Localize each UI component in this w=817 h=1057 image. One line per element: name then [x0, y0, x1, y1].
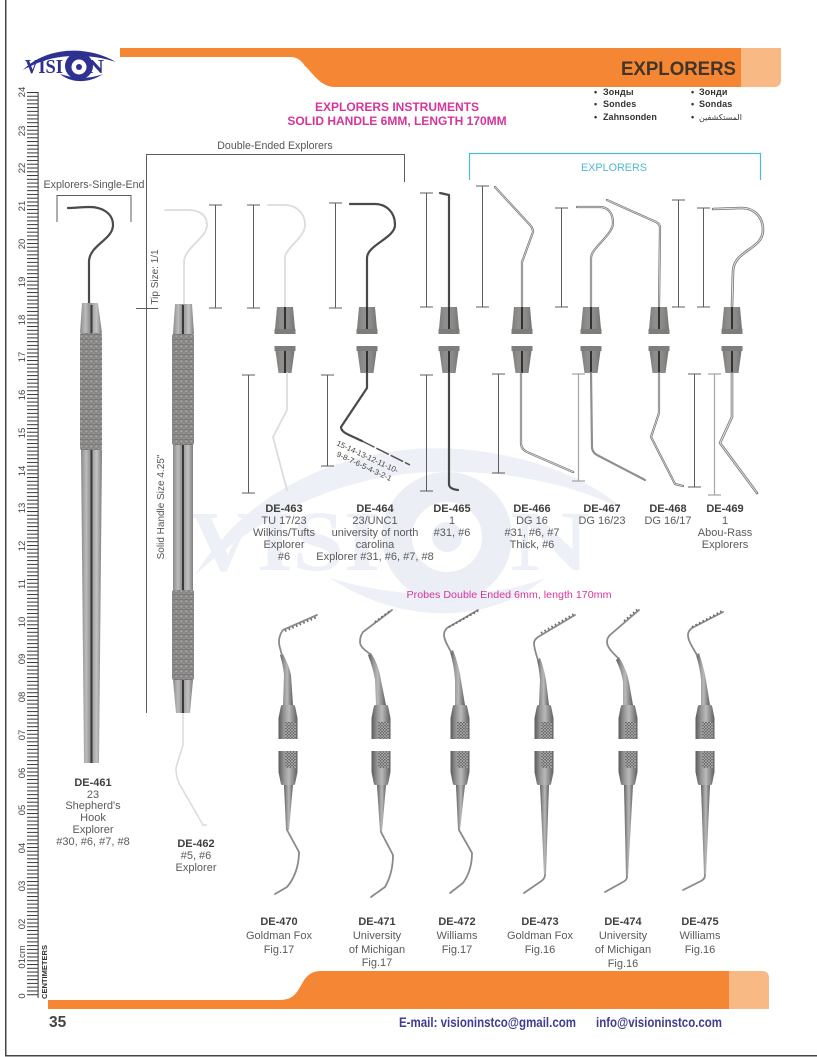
label: DE-466: DG 16	[516, 515, 548, 527]
multilingual names: •	[691, 87, 694, 97]
probe DE-473	[524, 614, 575, 893]
label: DE-474: Fig.16	[608, 958, 638, 970]
ruler: 22	[17, 163, 28, 173]
multilingual names: المستكشفين	[699, 113, 742, 122]
label: DE-464: university of north	[332, 527, 418, 539]
ruler: 0	[17, 993, 28, 999]
label: DE-466: DE-466	[513, 503, 551, 515]
bracket: double-ended: Double-Ended Explorers	[217, 140, 333, 152]
header band	[120, 48, 781, 87]
dimension lines	[209, 186, 721, 495]
watermark: Vision eye logo: VISI	[190, 493, 380, 589]
ruler: 04	[17, 843, 28, 853]
ruler: 18	[17, 315, 28, 325]
label: DE-472: DE-472	[438, 916, 476, 928]
ruler: 09	[17, 654, 28, 664]
bracket: double-ended: Solid Handle Size 4.25"	[156, 454, 167, 559]
multilingual names: Sondes	[603, 99, 636, 109]
multilingual names: Zahnsonden	[603, 112, 657, 122]
footer band	[48, 971, 769, 1009]
label: DE-475	[680, 916, 721, 956]
multilingual names: •	[594, 87, 597, 97]
ruler: 20	[17, 239, 28, 249]
label: DE-471: of Michigan	[349, 944, 405, 956]
DE-464 instrument: 15-14-13-12-11-10-	[335, 439, 400, 475]
label: DE-470: Fig.17	[264, 944, 294, 956]
DE-462 double-ended explorer	[165, 210, 207, 825]
ruler: 03	[17, 881, 28, 891]
label: DE-468: DE-468	[649, 503, 687, 515]
ruler: 11	[17, 579, 28, 589]
label: DE-473: Fig.16	[525, 944, 555, 956]
bracket: single-end	[44, 179, 145, 222]
label: DE-475: DE-475	[681, 916, 719, 928]
label: DE-467: DG 16/23	[578, 515, 626, 527]
bracket: explorers	[470, 154, 760, 180]
label: DE-470	[246, 916, 313, 956]
label: DE-469: Abou-Rass	[698, 527, 753, 539]
ruler: 23	[17, 126, 28, 136]
label: DE-473: DE-473	[521, 916, 559, 928]
label: DE-461: Explorer	[73, 824, 114, 836]
label: DE-465: DE-465	[433, 503, 471, 515]
ruler	[17, 87, 49, 999]
DE-465 instrument	[438, 193, 460, 490]
DE-464 instrument	[335, 204, 410, 483]
label: DE-462	[176, 838, 217, 874]
multilingual names: Зонди	[699, 87, 728, 97]
bracket: double-ended: Tip Size: 1/1	[150, 249, 161, 305]
multilingual names: •	[594, 99, 597, 109]
multilingual names: •	[594, 112, 597, 122]
label: DE-474: DE-474	[604, 916, 643, 928]
multilingual names: •	[691, 112, 694, 122]
label: DE-463	[253, 503, 315, 563]
DE-461 shepherd's hook	[68, 207, 113, 763]
label: DE-474	[595, 916, 651, 970]
ruler: 08	[17, 692, 28, 702]
ruler: 16	[17, 390, 28, 400]
contact emails	[399, 1014, 722, 1030]
ruler: 14	[17, 466, 28, 476]
label: DE-461: DE-461	[74, 777, 112, 789]
label: DE-462: #5, #6	[181, 850, 211, 862]
label: DE-472: Williams	[437, 930, 478, 942]
probe DE-470	[275, 615, 317, 894]
label: DE-462: DE-462	[177, 838, 215, 850]
label: DE-463: Explorer	[264, 539, 305, 551]
probe DE-472	[444, 610, 478, 893]
DE-469 instrument	[713, 208, 763, 493]
label: DE-473	[507, 916, 574, 956]
multilingual names	[594, 87, 742, 122]
label: DE-466	[504, 503, 560, 551]
label: DE-472	[437, 916, 478, 956]
DE-464 instrument: 9-8-7-6-5-4-3-2-1	[335, 450, 393, 483]
label: DE-461: Shepherd's	[65, 800, 121, 812]
label: DE-466: #31, #6, #7	[504, 527, 560, 539]
logo: Vision: N	[87, 56, 105, 78]
label: DE-469: DE-469	[706, 503, 744, 515]
label: DE-464: Explorer #31, #6, #7, #8	[316, 551, 434, 563]
probe DE-471	[360, 610, 393, 897]
label: DE-464	[316, 503, 434, 563]
ruler: 07	[17, 730, 28, 740]
logo: Vision: VISI	[25, 56, 63, 78]
ruler: 24	[17, 87, 28, 97]
contact emails: E-mail: visioninstco@gmail.com	[399, 1014, 576, 1030]
label: DE-461	[56, 777, 130, 848]
ruler: 19	[17, 277, 28, 287]
ruler: 10	[17, 617, 28, 627]
label: DE-461: #30, #6, #7, #8	[56, 836, 130, 848]
label: DE-475: Fig.16	[685, 944, 715, 956]
label: DE-468	[644, 503, 692, 527]
label: DE-474: of Michigan	[595, 944, 651, 956]
label: DE-465: 1	[449, 515, 455, 527]
label: DE-471: University	[353, 930, 402, 942]
title	[287, 100, 507, 128]
probe DE-475	[683, 611, 723, 890]
ruler: CENTIMETERS	[40, 945, 49, 999]
label: DE-461: Hook	[80, 812, 106, 824]
label: DE-471: DE-471	[358, 916, 396, 928]
label: DE-475: Williams	[680, 930, 721, 942]
label: DE-470: Goldman Fox	[246, 930, 313, 942]
DE-467 instrument	[577, 207, 645, 480]
page number: 35	[49, 1014, 67, 1031]
multilingual names: •	[691, 99, 694, 109]
logo: Vision	[23, 51, 116, 81]
bracket: explorers: EXPLORERS	[581, 162, 647, 174]
DE-468 instrument	[607, 200, 683, 486]
label: DE-469	[698, 503, 753, 551]
label: DE-464: DE-464	[356, 503, 395, 515]
label: DE-463: DE-463	[265, 503, 303, 515]
label: DE-466: Thick, #6	[510, 539, 554, 551]
DE-466 instrument	[495, 187, 573, 472]
label: DE-471	[349, 916, 405, 969]
label: DE-467: DE-467	[583, 503, 621, 515]
title: EXPLORERS INSTRUMENTS	[315, 100, 479, 114]
watermark: Vision eye logo	[190, 448, 625, 613]
label: DE-461: 23	[87, 789, 99, 801]
probe DE-474	[605, 609, 639, 892]
label: DE-464: carolina	[356, 539, 395, 551]
contact emails: info@visioninstco.com	[596, 1014, 722, 1030]
label: DE-472: Fig.17	[442, 944, 472, 956]
ruler: 21	[17, 201, 28, 211]
label: DE-464: 23/UNC1	[352, 515, 398, 527]
label: DE-463: TU 17/23	[261, 515, 307, 527]
ruler: 05	[17, 805, 28, 815]
label: DE-467	[578, 503, 626, 527]
ruler: 15	[17, 428, 28, 438]
multilingual names: Зонды	[603, 87, 634, 97]
label: DE-471: Fig.17	[362, 957, 392, 969]
ruler: 06	[17, 768, 28, 778]
label: DE-465: #31, #6	[434, 527, 470, 539]
bracket: double-ended	[136, 140, 404, 713]
label: DE-468: DG 16/17	[644, 515, 692, 527]
heading: probes: Probes Double Ended 6mm, length 170mm	[406, 590, 612, 601]
multilingual names: Sondas	[699, 99, 732, 109]
label: DE-463: Wilkins/Tufts	[253, 527, 315, 539]
bracket: single-end: Explorers-Single-End	[44, 179, 145, 191]
ruler: 01cm	[17, 945, 28, 969]
DE-463 instrument	[268, 205, 305, 490]
label: DE-469: Explorers	[702, 539, 749, 551]
title: SOLID HANDLE 6MM, LENGTH 170MM	[287, 114, 507, 128]
label: DE-463: #6	[278, 551, 290, 563]
label: DE-462: Explorer	[176, 862, 217, 874]
label: DE-474: University	[599, 930, 648, 942]
ruler: 12	[17, 541, 28, 551]
label: DE-473: Goldman Fox	[507, 930, 574, 942]
label: DE-465	[433, 503, 471, 539]
label: DE-470: DE-470	[260, 916, 298, 928]
label: DE-469: 1	[722, 515, 728, 527]
ruler: 13	[17, 503, 28, 513]
heading: EXPLORERS: EXPLORERS	[621, 59, 736, 80]
ruler: 17	[17, 352, 28, 362]
ruler: 02	[17, 919, 28, 929]
watermark: Vision eye logo: N	[510, 493, 590, 589]
